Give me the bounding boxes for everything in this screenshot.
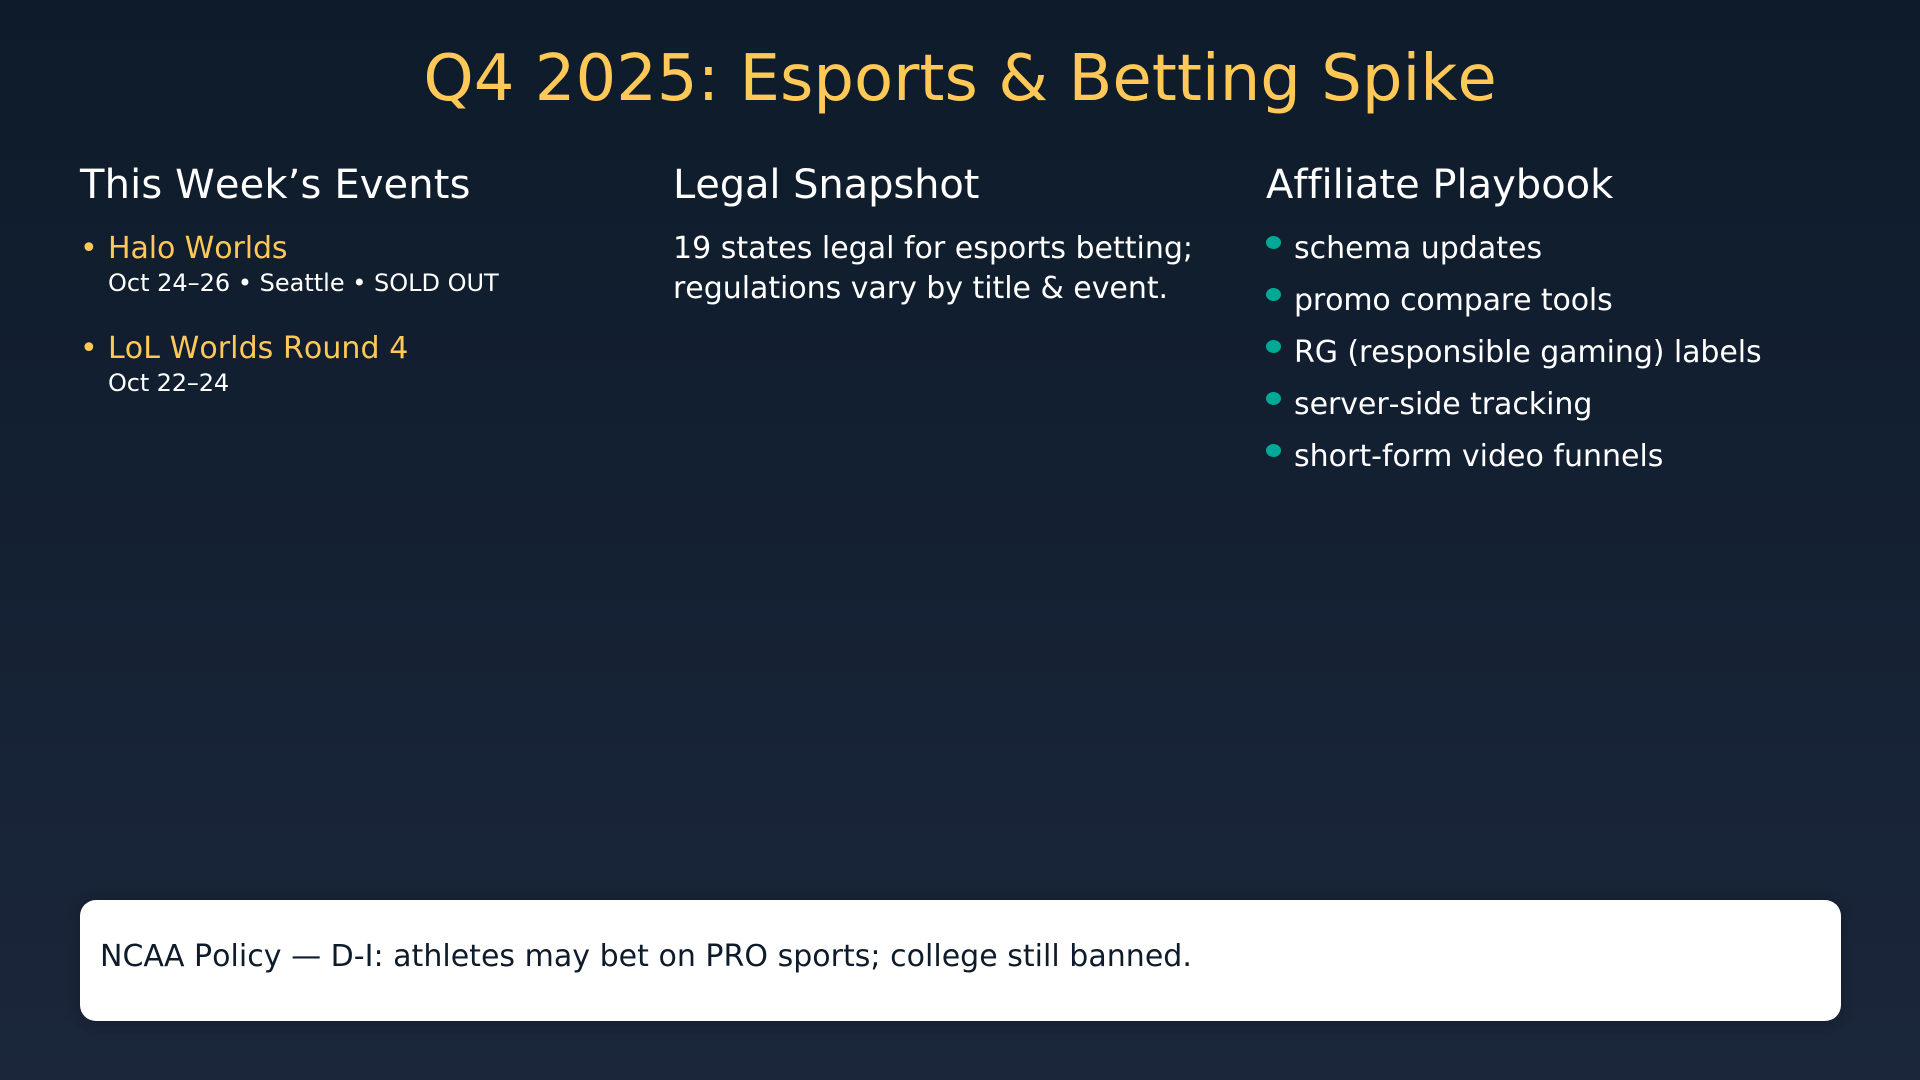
list item: promo compare tools: promo compare tools <box>1294 283 1613 318</box>
event: LoL Worlds Round 4: LoL Worlds Round 4 <box>108 331 408 366</box>
legal text <box>673 231 1193 306</box>
legal text: 19 states legal for esports betting; <box>673 231 1193 266</box>
list item: RG labels: RG (responsible gaming) labels <box>1294 335 1762 370</box>
event: Halo Worlds: • <box>80 231 98 266</box>
list item: server-side tracking: server-side tracking <box>1294 387 1592 422</box>
callout text: NCAA Policy — D-I: athletes may bet on PRO sports; college still banned. <box>100 939 1192 974</box>
panel: legal snapshot <box>673 162 1193 306</box>
heading: affiliate playbook: Affiliate Playbook <box>1266 162 1613 208</box>
panel: this week's events <box>80 162 499 397</box>
event details: Halo Worlds: Oct 24–26 • Seattle • SOLD OUT <box>108 269 499 297</box>
heading: this week's events: This Week’s Events <box>80 162 471 208</box>
list item: short-form video funnels: short-form video funnels <box>1294 439 1663 474</box>
legal text: regulations vary by title & event. <box>673 271 1168 306</box>
event: LoL Worlds Round 4: • <box>80 331 98 366</box>
event: Halo Worlds: Halo Worlds <box>108 231 287 266</box>
title: Q4 2025: Esports & Betting Spike <box>423 42 1497 116</box>
heading: legal snapshot: Legal Snapshot <box>673 162 979 208</box>
callout: NCAA policy <box>80 900 1841 1021</box>
list item: schema updates: schema updates <box>1294 231 1542 266</box>
event details: LoL Worlds Round 4: Oct 22–24 <box>108 369 229 397</box>
panel: affiliate playbook <box>1266 162 1762 474</box>
